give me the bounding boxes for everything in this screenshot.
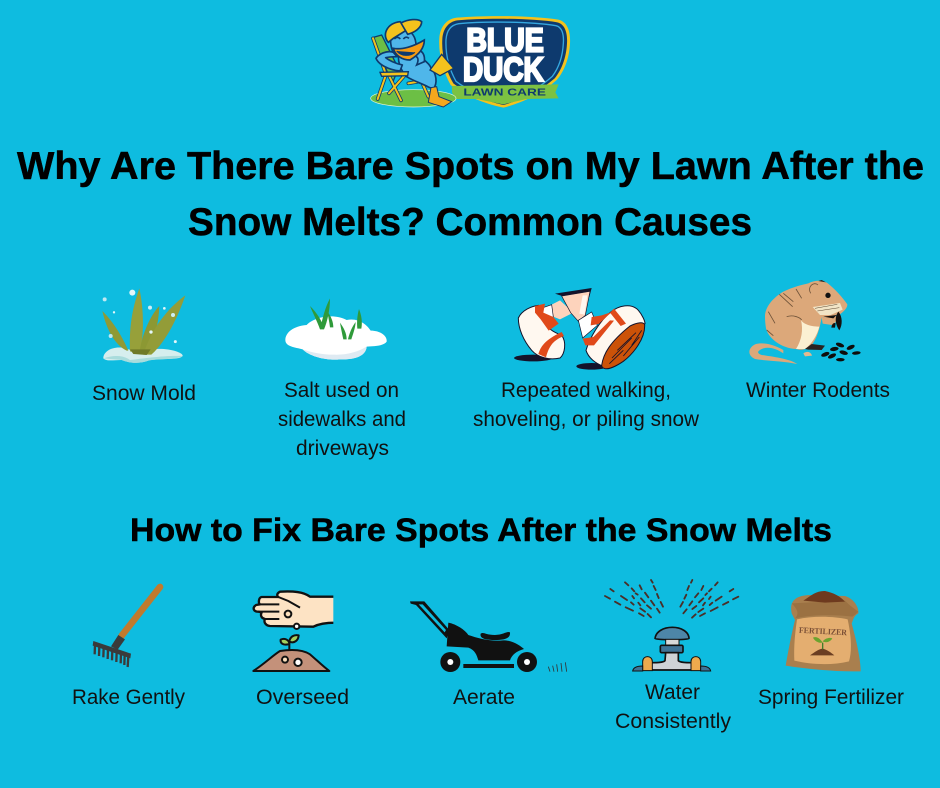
panel: common causes: [92, 280, 890, 460]
label: snow mold: Snow Mold: [92, 382, 196, 405]
icon: sprinkler: [605, 580, 738, 671]
label: winter rodents: Winter Rodents: [746, 379, 890, 402]
cause: snow mold: [92, 288, 196, 405]
label: salt used on sidewalks and driveways: driveways: [296, 437, 389, 460]
label: repeated walking, shoveling, or piling snow: shoveling, or piling snow: [473, 408, 700, 431]
cause: winter rodents: [746, 280, 890, 402]
title: [17, 145, 924, 244]
cause: repeated walking: [473, 288, 700, 431]
panel: fixes: [72, 580, 904, 733]
icon: snowy grass mound: [285, 298, 387, 360]
label: rake gently: Rake Gently: [72, 686, 185, 709]
icon: rodent eating seeds: [749, 280, 861, 364]
icon: fertilizer sack: FERTILIZER: [799, 626, 848, 637]
fix: spring fertilizer: [758, 591, 904, 709]
title: Snow Melts? Common Causes: [188, 201, 752, 244]
fix: overseed: [253, 591, 349, 709]
label: salt used on sidewalks and driveways: Salt used on: [284, 379, 399, 402]
logo badge: LAWN CARE: [463, 88, 546, 99]
label: water consistently: Consistently: [615, 710, 731, 733]
fix: aerate: [410, 601, 567, 709]
fix: rake gently: [72, 587, 185, 709]
logo badge: BLUE: [466, 23, 544, 60]
icon: lawn mower: [410, 601, 567, 672]
icon: fertilizer sack: [786, 591, 861, 671]
cause: salt: [278, 298, 406, 460]
icon: snow mold grass: [102, 288, 185, 363]
label: spring fertilizer: Spring Fertilizer: [758, 686, 904, 709]
fix: water consistently: [605, 580, 738, 733]
icon: rake: [93, 587, 160, 667]
label: repeated walking, shoveling, or piling snow: [473, 379, 700, 431]
icon: hand sowing seed: [253, 591, 337, 671]
label: water consistently: Water: [645, 681, 700, 704]
logo badge: DUCK: [463, 51, 544, 89]
logo badge: [439, 16, 570, 108]
label: repeated walking, shoveling, or piling snow: Repeated walking,: [501, 379, 671, 402]
label: aerate: Aerate: [453, 686, 515, 709]
heading: how to fix: How to Fix Bare Spots After the Snow Melts: [130, 512, 832, 548]
label: water consistently: [615, 681, 731, 733]
logo duck on lawn chair: [371, 20, 456, 107]
icon: walking sneakers: [514, 288, 645, 370]
logo: Blue Duck Lawn Care: [371, 16, 570, 108]
title: Why Are There Bare Spots on My Lawn After the: [17, 145, 924, 188]
label: salt used on sidewalks and driveways: [278, 379, 406, 460]
label: overseed: Overseed: [256, 686, 349, 709]
label: salt used on sidewalks and driveways: sidewalks and: [278, 408, 406, 431]
